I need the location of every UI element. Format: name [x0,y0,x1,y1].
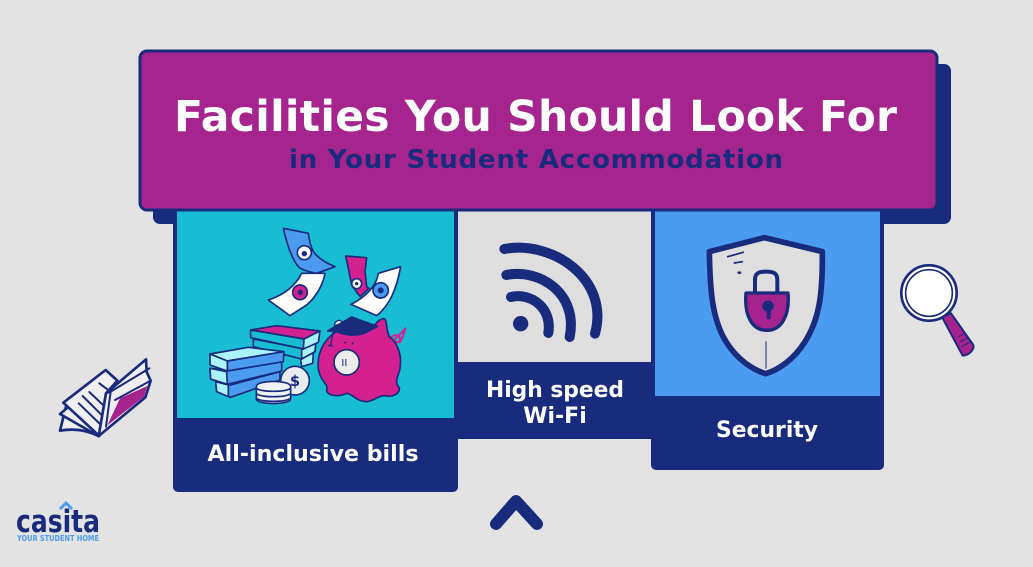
panel: high speed wi-fi: Wi-Fi [523,404,587,429]
logo roof mark [60,503,72,509]
label: high speed wi-fi: High speed [486,378,624,403]
logo tagline: YOUR STUDENT HOME [16,534,99,543]
icon: wi-fi [504,248,597,337]
icon: magnifying glass [901,265,974,356]
icon: open book [60,359,151,436]
illustration: falling money and piggy bank: $ [290,373,300,390]
stacks of notes, back [300,353,313,367]
logo: casita [16,503,100,543]
panel: security [651,205,884,470]
title panel shadow [153,64,951,224]
title: Facilities You Should Look For [174,93,897,142]
illustration: piggy bank with graduation cap [318,317,405,402]
label: security: Security [716,418,818,443]
panel: high speed wi-fi [455,205,653,439]
logo wordmark: casita [16,504,100,540]
title panel [140,51,937,210]
stacks of notes, front [216,372,280,397]
illustration: falling money and piggy bank [210,228,401,403]
label: all-inclusive bills: All-inclusive bills [208,442,418,467]
coin with dollar [281,366,309,395]
icon: shield with padlock [709,238,822,374]
arrow: chevron up [496,501,537,524]
panel: all-inclusive bills [173,205,458,492]
subtitle: in Your Student Accommodation [289,145,783,175]
coin stack [256,381,291,403]
